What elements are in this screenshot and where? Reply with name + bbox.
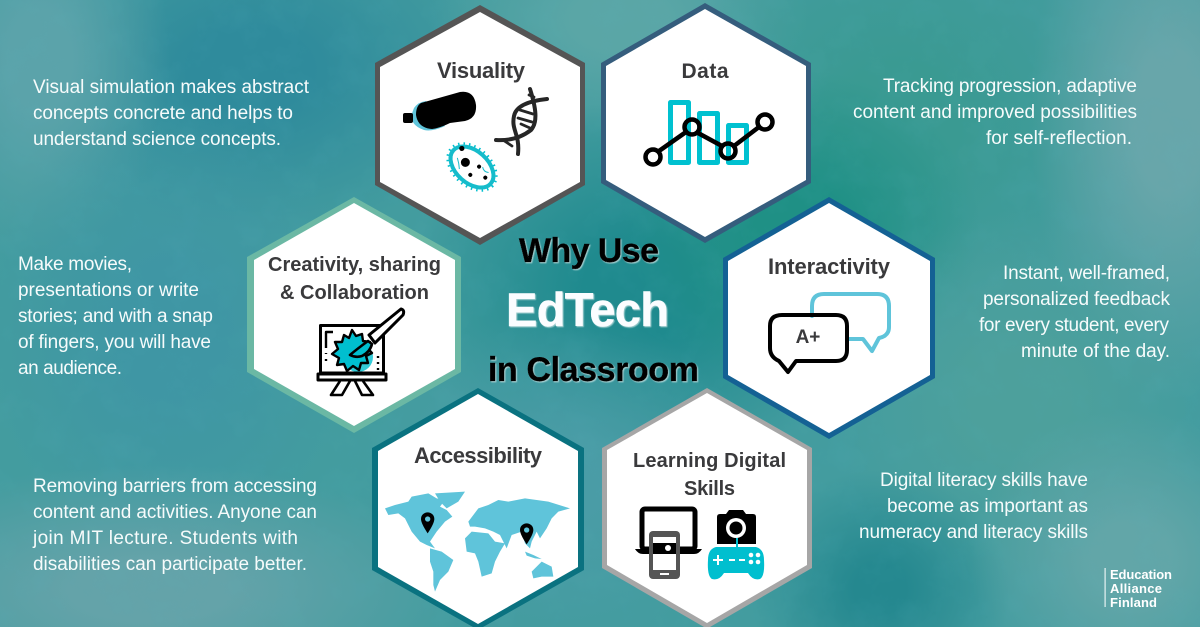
text block: Digital skills description: numeracy and literacy skills: [859, 522, 1088, 543]
hexagon: Learning Digital Skills: [602, 388, 812, 627]
icon: microbe: [438, 134, 506, 200]
text block: Creativity description: of fingers, you will have: [18, 332, 211, 353]
logo: Education Alliance Finland: Alliance: [1110, 581, 1162, 596]
text block: Creativity description: stories; and with a snap: [18, 306, 213, 327]
title line: Why Use: Why Use: [519, 232, 659, 270]
text block: Interactivity description: for every student, every: [979, 315, 1170, 336]
text block: Digital skills description: Digital literacy skills have: [880, 470, 1088, 491]
heading: Learning Digital Skills: Learning Digital: [633, 450, 786, 472]
hexagon: Creativity, sharing & Collaboration: [247, 197, 461, 433]
text block: Accessibility description: content and activities. Anyone can: [33, 502, 317, 523]
text block: Data description: Tracking progression, adaptive: [883, 76, 1137, 97]
heading: Creativity, sharing & Collaboration: Creativity, sharing: [268, 254, 441, 276]
logo: Education Alliance Finland: [1104, 567, 1172, 610]
heading: Creativity, sharing & Collaboration: & Collaboration: [280, 282, 429, 304]
heading: Data: Data: [682, 60, 729, 83]
heading: Learning Digital Skills: [633, 450, 786, 500]
text block: Accessibility description: join MIT lecture. Students with: [32, 528, 298, 549]
text block: Interactivity description: minute of the day.: [1021, 341, 1170, 362]
heading: Interactivity: Interactivity: [768, 254, 891, 279]
text block: Digital skills description: become as important as: [887, 496, 1088, 517]
text block: Creativity description: presentations or write: [18, 280, 199, 301]
icon: painting easel: [318, 309, 404, 395]
text block: Visuality description: understand science concepts.: [33, 129, 281, 150]
icon: camera: [717, 510, 756, 548]
heading: Visuality: Visuality: [437, 58, 526, 83]
text block: Accessibility description: [32, 476, 317, 575]
text block: Visuality description: [33, 77, 310, 150]
text block: Interactivity description: [979, 263, 1170, 362]
icon: speech bubbles with A+: A+: [796, 327, 820, 348]
world map with pins: [385, 492, 570, 592]
text block: Visuality description: Visual simulation makes abstract: [33, 77, 310, 98]
heading: Accessibility: Accessibility: [414, 443, 543, 468]
text block: Creativity description: [18, 254, 213, 379]
heading: Learning Digital Skills: Skills: [684, 478, 735, 500]
icon: DNA helix: [496, 89, 547, 154]
hexagon: Data: [601, 3, 811, 243]
text block: Interactivity description: Instant, well-framed,: [1003, 263, 1170, 284]
text block: Creativity description: an audience.: [18, 358, 122, 379]
logo: Education Alliance Finland: Education: [1110, 567, 1172, 582]
text block: Data description: for self-reflection.: [986, 128, 1132, 149]
text block: Digital skills description: [859, 470, 1088, 543]
title line: EdTech: EdTech: [506, 283, 669, 336]
text block: Data description: [853, 76, 1137, 149]
title line: in Classroom: in Classroom: [488, 351, 699, 389]
text block: Visuality description: concepts concrete and helps to: [33, 103, 293, 124]
icon: game controller: [708, 547, 764, 579]
hexagon: Interactivity: [723, 197, 935, 439]
center title: [488, 232, 699, 389]
chart icon: bars and line: [646, 102, 772, 164]
icon: laptop and phone: [635, 509, 702, 579]
text block: Creativity description: Make movies,: [18, 254, 132, 275]
heading: Creativity, sharing & Collaboration: [268, 254, 441, 304]
icon: speech bubbles with A+: [770, 294, 889, 372]
icon: VR headset: [403, 92, 476, 130]
text block: Accessibility description: Removing barriers from accessing: [33, 476, 317, 497]
text block: Interactivity description: personalized feedback: [983, 289, 1170, 310]
hexagon: Visuality: [375, 5, 585, 245]
logo: Education Alliance Finland: Finland: [1110, 595, 1157, 610]
hexagon: Accessibility: [372, 388, 584, 627]
text block: Data description: content and improved possibilities: [853, 102, 1137, 123]
text block: Accessibility description: disabilities can participate better.: [33, 554, 307, 575]
